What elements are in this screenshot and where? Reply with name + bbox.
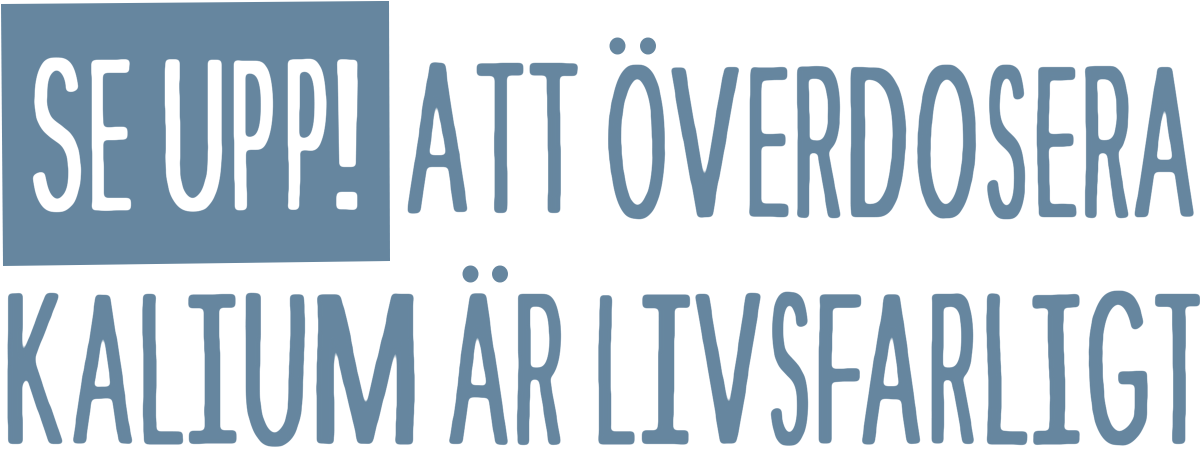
heading: Att överdosera: E (748, 17, 788, 268)
heading: Att överdosera: A (409, 13, 466, 264)
heading: Se upp!: P (233, 10, 274, 261)
panel: blue tag background (1, 1, 390, 266)
icon: dots of the letter Ä (458, 256, 508, 282)
heading: Se upp!: ! (326, 10, 368, 261)
heading: Se upp! (31, 10, 369, 261)
heading: Att överdosera: R (1083, 17, 1130, 268)
heading: Att överdosera: Ö (608, 17, 666, 268)
heading: Att överdosera: O (917, 17, 976, 268)
heading: Att överdosera: R (795, 17, 842, 268)
icon: dots of the letter Ö (610, 26, 660, 54)
heading: Se upp!: P (286, 10, 326, 261)
heading: Se upp!: S (31, 10, 80, 261)
heading: Att överdosera: V (673, 17, 737, 268)
heading: Att överdosera: T (532, 13, 576, 264)
heading: Se upp!: E (90, 10, 130, 261)
callout: Se upp! label (1, 1, 390, 266)
heading: Att överdosera: T (478, 13, 523, 264)
heading: kalium är livsfarligt (3, 244, 1200, 453)
heading: Att överdosera (409, 13, 1192, 268)
heading: Se upp!: U (161, 10, 226, 261)
heading: Att överdosera: S (987, 17, 1025, 268)
heading: Att överdosera: E (1036, 17, 1076, 268)
heading: Att överdosera: D (847, 17, 907, 268)
